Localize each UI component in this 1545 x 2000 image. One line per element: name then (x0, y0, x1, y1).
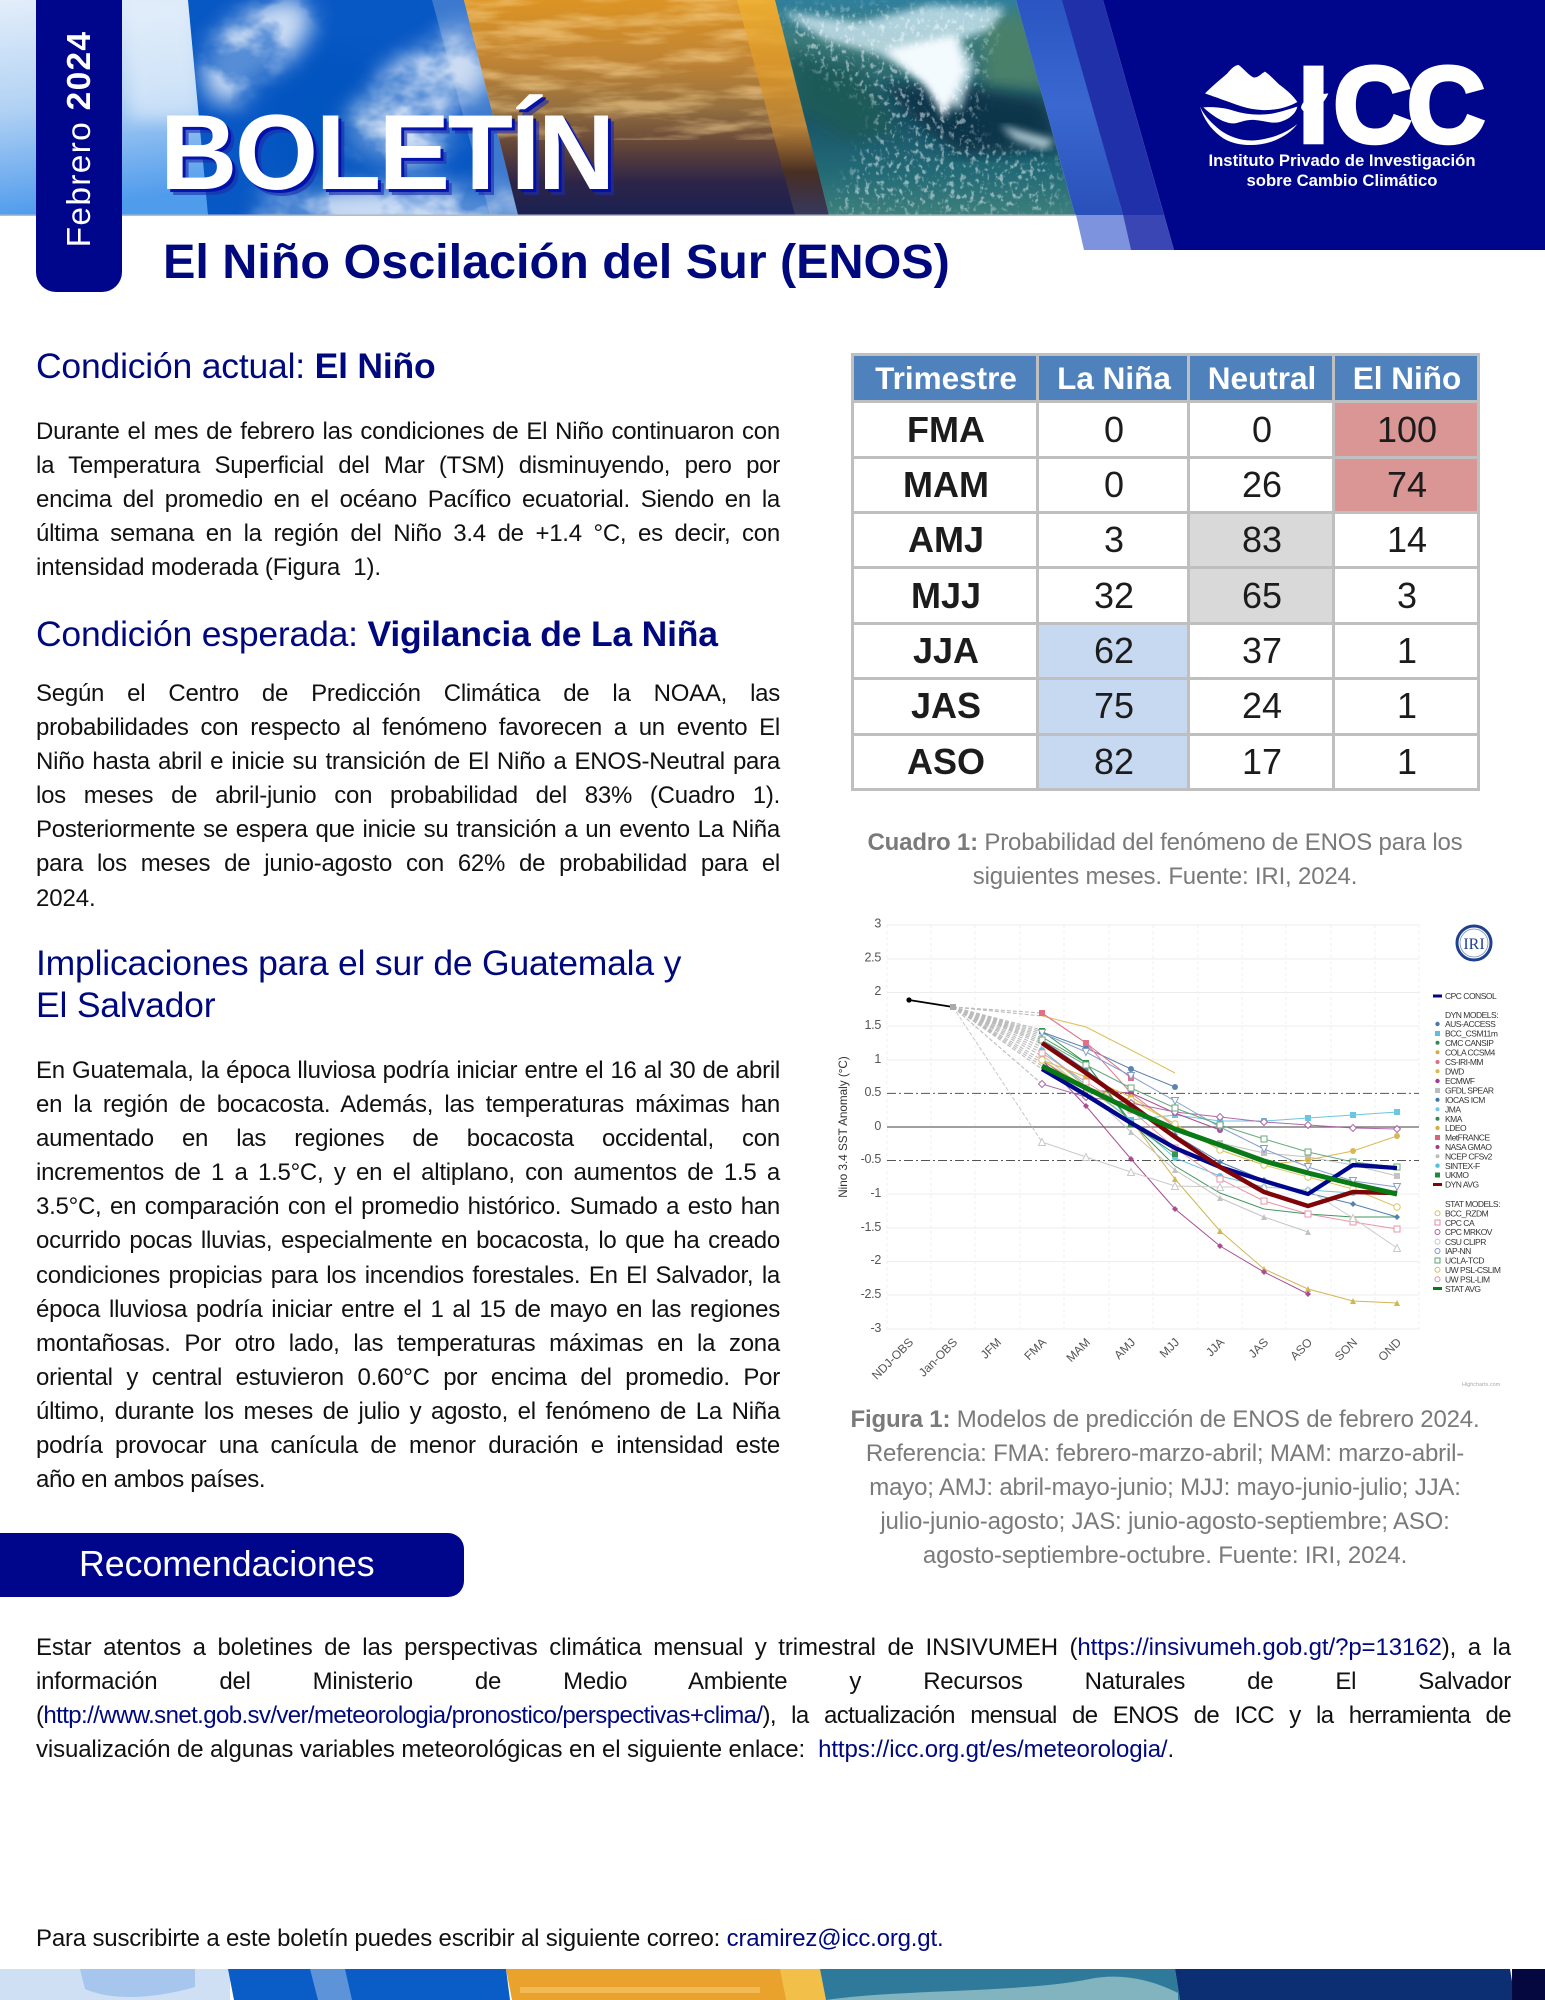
text: implicaciones: 3.5°C, en comparación con el promedio histórico. Sumado a esto han (36, 1193, 780, 1220)
table: probabilities: 32 (1094, 575, 1134, 616)
y axis labels: -1.5 (861, 1220, 881, 1234)
orange sunset section (464, 0, 834, 215)
table: probabilities: JAS (911, 685, 981, 726)
y axis labels: 2.5 (865, 950, 881, 964)
text: recomendaciones: (http://www.snet.gob.sv/ver/meteorologia/pronostico/perspectivas+clima/), la actualización mensual de ENOS de ICC y la herramienta de (36, 1702, 1511, 1729)
legend: UW PSL-LIM (1445, 1274, 1490, 1284)
x axis labels: SON (1332, 1335, 1360, 1364)
logo caption (1208, 151, 1476, 190)
table: probabilities: 0 (1252, 408, 1272, 450)
text: implicaciones (36, 1057, 780, 1493)
text: suscripción: Para suscribirte a este boletín puedes escribir al siguiente correo: cramirez@icc.org.gt. (36, 1925, 943, 1952)
table: probabilities: La Niña (1057, 360, 1171, 396)
x axis labels: NDJ-OBS (869, 1335, 916, 1382)
text: implicaciones: condiciones propicias para los incendios forestales. En El Salvador, la (36, 1262, 780, 1289)
legend: DYN AVG (1445, 1180, 1479, 1190)
logo caption: sobre Cambio Climático (1246, 171, 1438, 190)
legend: UKMO (1445, 1170, 1469, 1180)
x axis labels: MAM (1063, 1335, 1093, 1365)
x axis labels (869, 1335, 1404, 1382)
y axis labels: 3 (874, 916, 881, 930)
table: probabilities: 3 (1104, 519, 1124, 560)
legend: DYN MODELS: (1445, 1010, 1498, 1020)
heading: implicaciones: El Salvador (36, 985, 215, 1025)
table: probabilities: El Niño (1353, 360, 1461, 396)
text: implicaciones: ocurrido pocas lluvias, especialmente en bocacosta, lo que ha creado (36, 1227, 780, 1254)
text: condición esperada (36, 680, 780, 912)
caption: figura 1 (851, 1406, 1479, 1569)
caption: figura 1: Figura 1: Modelos de predicción de ENOS de febrero 2024. (851, 1406, 1479, 1433)
text: condición actual: intensidad moderada (Figura 1). (36, 554, 381, 581)
table: probabilities (851, 353, 1480, 791)
table: probabilities: 14 (1387, 519, 1427, 560)
section bar: recomendaciones: Recomendaciones (79, 1544, 375, 1584)
legend: DWD (1445, 1066, 1464, 1076)
table: probabilities: 1 (1397, 685, 1417, 726)
plot grid (887, 925, 1419, 1329)
table: probabilities: 1 (1397, 630, 1417, 671)
table: probabilities: 0 (1104, 408, 1124, 450)
legend: IOCAS ICM (1445, 1095, 1485, 1105)
text: condición actual: la Temperatura Superficial del Mar (TSM) disminuyendo, pero por (36, 452, 780, 479)
table: probabilities: 83 (1242, 519, 1282, 560)
x axis labels: JJA (1203, 1335, 1227, 1359)
legend: AUS-ACCESS (1445, 1019, 1496, 1029)
table: probabilities: 100 (1377, 408, 1437, 450)
legend: NASA GMAO (1445, 1142, 1492, 1152)
legend: CMC CANSIP (1445, 1038, 1494, 1048)
text: implicaciones: oriental y central estuvieron 0.60°C por encima del promedio. Por (36, 1364, 780, 1391)
legend: ECMWF (1445, 1076, 1475, 1086)
caption: figura 1: Referencia: FMA: febrero-marzo-abril; MAM: marzo-abril- (866, 1440, 1464, 1467)
table: probabilities: 37 (1242, 630, 1282, 671)
photo bottom edge (0, 214, 1076, 216)
text: implicaciones: montañosas. Por otro lado, las temperaturas máximas en la zona (36, 1330, 780, 1357)
caption: cuadro 1 (868, 829, 1462, 890)
caption: figura 1: agosto-septiembre-octubre. Fuente: IRI, 2024. (923, 1542, 1407, 1569)
legend: COLA CCSM4 (1445, 1048, 1496, 1058)
table: probabilities: Neutral (1208, 360, 1316, 396)
legend: LDEO (1445, 1123, 1467, 1133)
text: condición actual: última semana en la región del Niño 3.4 de +1.4 °C, es decir, con (36, 520, 780, 547)
x axis labels: FMA (1021, 1335, 1049, 1363)
text: implicaciones: último, durante los meses de julio y agosto, el fenómeno de La Niña (36, 1398, 780, 1425)
text: condición esperada: para los meses de junio-agosto con 62% de probabilidad para el (36, 850, 780, 877)
legend (1433, 991, 1501, 1294)
blue slanted bands (1016, 0, 1174, 250)
legend: IAP-NN (1445, 1246, 1471, 1256)
average lines (1042, 1043, 1397, 1206)
text: condición actual (36, 418, 780, 581)
y axis labels: 1 (874, 1052, 881, 1066)
y axis labels: -3 (870, 1321, 881, 1335)
text: condición esperada: 2024. (36, 885, 96, 912)
legend: STAT MODELS: (1445, 1199, 1500, 1209)
table: probabilities: 3 (1397, 575, 1417, 616)
y axis labels: 0 (874, 1119, 881, 1133)
logo caption: Instituto Privado de Investigación (1208, 151, 1476, 170)
blue sky section with clouds (180, 0, 525, 215)
y axis labels: -2 (870, 1253, 881, 1267)
date tab (36, 0, 122, 292)
table: probabilities: 0 (1104, 464, 1124, 505)
text: implicaciones: en la región de bocacosta. Además, las temperaturas máximas han (36, 1091, 780, 1118)
table: probabilities: Trimestre (875, 360, 1017, 396)
heading: condición actual: Condición actual: El Niño (36, 346, 435, 386)
observed line and dashed fan (906, 997, 1042, 1142)
footer photo strip (0, 1969, 1545, 2000)
x axis labels: JAS (1246, 1335, 1271, 1361)
text: condición actual: Durante el mes de febrero las condiciones de El Niño continuaron con (36, 418, 780, 445)
table: probabilities: AMJ (908, 519, 984, 560)
legend: CSU CLIPR (1445, 1237, 1486, 1247)
navy logo block (1103, 0, 1545, 250)
x axis labels: JFM (978, 1335, 1004, 1362)
y axis labels: 1.5 (865, 1018, 881, 1032)
text: recomendaciones: visualización de algunas variables meteorológicas en el siguiente enlace: https://icc.org.gt/es/meteorologia/. (36, 1736, 1174, 1763)
text: implicaciones: En Guatemala, la época lluviosa podría iniciar entre el 16 al 30 de abril (36, 1057, 780, 1084)
y axis labels: -0.5 (861, 1152, 881, 1166)
x axis labels: MJJ (1157, 1335, 1182, 1361)
heading: implicaciones: Implicaciones para el sur de Guatemala y (36, 943, 681, 983)
x axis labels: OND (1375, 1335, 1404, 1364)
heading: implicaciones (36, 943, 682, 1025)
table: probabilities: ASO (907, 741, 985, 782)
caption: figura 1: julio-junio-agosto; JAS: junio-agosto-septiembre; ASO: (880, 1508, 1450, 1535)
y axis labels (861, 916, 881, 1335)
y axis labels: 0.5 (865, 1085, 881, 1099)
section bar: recomendaciones (0, 1533, 464, 1597)
icon: mountain, waves and leaf (1200, 65, 1328, 145)
table: probabilities: 26 (1242, 464, 1282, 505)
chart: Niño 3.4 forecast plumes (837, 916, 1501, 1388)
table: probabilities: 75 (1094, 685, 1134, 726)
legend: CPC CA (1445, 1218, 1475, 1228)
y axis labels: -2.5 (861, 1287, 881, 1301)
icon: IRI logo (1457, 926, 1491, 960)
legend: MetFRANCE (1445, 1132, 1490, 1142)
text: condición esperada: Según el Centro de Predicción Climática de la NOAA, las (36, 680, 780, 707)
legend: NCEP CFSv2 (1445, 1152, 1493, 1162)
table: probabilities: FMA (907, 408, 985, 450)
title: BOLETÍN: BOLETÍN (160, 92, 613, 212)
table: probabilities: 82 (1094, 741, 1134, 782)
x axis labels: Jan-OBS (916, 1335, 960, 1380)
text: implicaciones: incrementos de 1 a 1.5°C, y en el altiplano, con aumentos de 1.5 a (36, 1159, 780, 1186)
text: implicaciones: podría provocar una canícula de menor duración e intensidad este (36, 1432, 780, 1459)
table: probabilities: MJJ (911, 575, 981, 616)
legend: CPC CONSOL (1445, 991, 1497, 1001)
table: probabilities: 24 (1242, 685, 1282, 726)
text: implicaciones: época lluviosa podría iniciar entre el 1 al 15 de mayo en las regiones (36, 1296, 780, 1323)
legend: STAT AVG (1445, 1284, 1481, 1294)
ocean wave section (775, 0, 1080, 215)
legend: UCLA-TCD (1445, 1256, 1484, 1266)
heading: condición esperada: Condición esperada: Vigilancia de La Niña (36, 614, 718, 654)
text: implicaciones: aumentado en las regiones de bocacosta occidental, con (36, 1125, 780, 1152)
date text: Febrero 2024 (61, 31, 98, 247)
legend: JMA (1445, 1104, 1461, 1114)
text: recomendaciones: información del Ministerio de Medio Ambiente y Recursos Naturales de El Salvador (36, 1668, 1511, 1695)
pale sky section (0, 0, 230, 215)
legend: CS-IRI-MM (1445, 1057, 1483, 1067)
y axis labels: -1 (870, 1186, 881, 1200)
legend: SINTEX-F (1445, 1161, 1480, 1171)
text: recomendaciones (36, 1634, 1512, 1763)
model forecast lines (1042, 1013, 1397, 1303)
x axis labels: AMJ (1111, 1335, 1138, 1362)
table: probabilities: 74 (1387, 464, 1427, 505)
chart credit: Highcharts.com (1462, 1382, 1501, 1388)
table: probabilities: 62 (1094, 630, 1134, 671)
table: probabilities: MAM (903, 464, 989, 505)
text: recomendaciones: Estar atentos a boletines de las perspectivas climática mensual y trimestral de INSIVUMEH (https://insivumeh.gob.gt/?p=13162), a la (36, 1634, 1511, 1661)
text: condición actual: encima del promedio en el océano Pacífico ecuatorial. Siendo en la (36, 486, 780, 513)
logo letters: ICC (1298, 44, 1481, 165)
legend: CPC MRKOV (1445, 1227, 1493, 1237)
table: probabilities: JJA (913, 630, 979, 671)
y axis title: Nino 3.4 SST Anomaly (°C) (837, 1056, 850, 1198)
logo: ICC (1200, 44, 1485, 190)
legend: BCC_CSM11m (1445, 1028, 1498, 1038)
text: condición esperada: probabilidades con respecto al fenómeno favorecen a un evento El (36, 714, 780, 741)
legend: UW PSL-CSLIM (1445, 1265, 1501, 1275)
y axis labels: 2 (874, 984, 881, 998)
subtitle: El Niño Oscilación del Sur (ENOS) (163, 235, 950, 289)
x axis labels: ASO (1287, 1335, 1315, 1363)
icon: IRI logo: IRI (1463, 936, 1485, 953)
text: condición esperada: Niño hasta abril e inicie su transición de El Niño a ENOS-Neutral para (36, 748, 780, 775)
table: probabilities: 1 (1397, 741, 1417, 782)
table: probabilities: 17 (1242, 741, 1282, 782)
legend: KMA (1445, 1114, 1463, 1124)
legend: GFDL SPEAR (1445, 1086, 1494, 1096)
table: probabilities: 65 (1242, 575, 1282, 616)
caption: cuadro 1: Cuadro 1: Probabilidad del fenómeno de ENOS para los (868, 829, 1462, 856)
banner: photographic header strip (0, 0, 1545, 250)
text: implicaciones: año en ambos países. (36, 1466, 265, 1493)
caption: figura 1: mayo; AMJ: abril-mayo-junio; MJJ: mayo-junio-julio; JJA: (869, 1474, 1461, 1501)
legend: BCC_RZDM (1445, 1208, 1489, 1218)
caption: cuadro 1: siguientes meses. Fuente: IRI, 2024. (973, 863, 1357, 890)
text: condición esperada: los meses de abril-junio con probabilidad del 83% (Cuadro 1). (36, 782, 780, 809)
text: condición esperada: Posteriormente se espera que inicie su transición a un evento La Niña (36, 816, 780, 843)
